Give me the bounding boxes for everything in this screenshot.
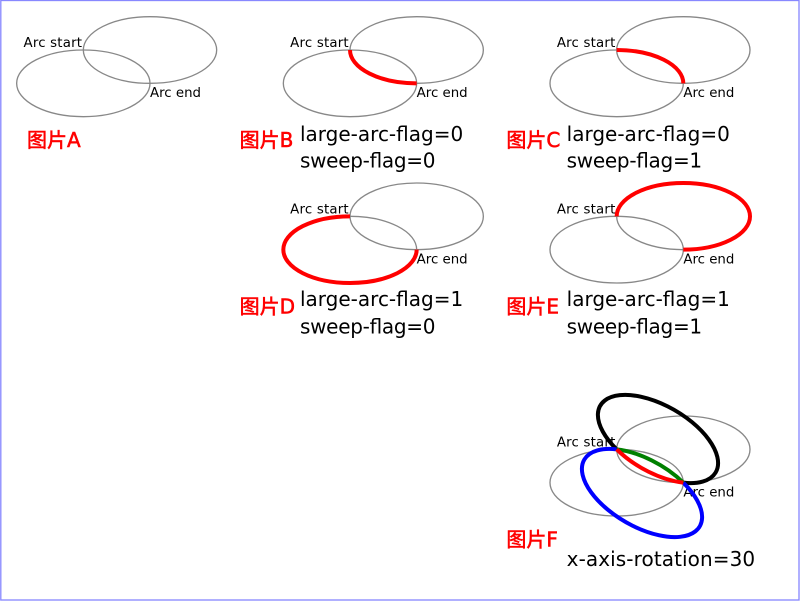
heading: figure F: 图片F	[506, 527, 558, 551]
text: figure D flags: sweep-flag=0	[300, 315, 436, 339]
panel: figure C	[506, 17, 750, 173]
panel: figure A: Arc start	[24, 36, 82, 51]
heading: figure E: 图片E	[506, 294, 559, 318]
panel: figure C: Arc end	[683, 86, 734, 101]
text: figure C flags: large-arc-flag=0	[567, 122, 730, 146]
panel: figure E: Arc end	[683, 252, 734, 267]
panel: figure A	[17, 17, 217, 152]
panel: figure B: Arc end	[417, 86, 468, 101]
heading: figure A: 图片A	[27, 128, 81, 152]
panel: figure C: Arc start	[557, 36, 615, 51]
panel: figure F	[506, 395, 755, 571]
panel: figure A: Arc end	[150, 86, 201, 101]
heading: figure C: 图片C	[506, 128, 560, 152]
panel: figure F: Arc end	[683, 485, 734, 500]
panel: figure B: Arc start	[290, 36, 349, 51]
text: figure C flags: sweep-flag=1	[567, 149, 702, 173]
text: figure E flags: sweep-flag=1	[567, 315, 702, 339]
text: figure E flags: large-arc-flag=1	[567, 287, 730, 311]
panel: figure D: Arc end	[417, 252, 468, 267]
panel: figure E: Arc start	[557, 202, 615, 217]
panel: figure E	[506, 183, 750, 339]
text: figure D flags: large-arc-flag=1	[300, 287, 463, 311]
panel: figure F: Arc start	[557, 435, 615, 450]
heading: figure B: 图片B	[240, 128, 293, 152]
text: figure B flags	[300, 122, 463, 173]
panel: figure D: Arc start	[290, 202, 349, 217]
text: figure F rotation: x-axis-rotation=30	[567, 547, 755, 571]
text: figure C flags	[567, 122, 730, 173]
text: figure E flags	[567, 287, 730, 339]
text: figure D flags	[300, 287, 463, 339]
heading: figure D: 图片D	[240, 294, 295, 318]
panel: figure B	[240, 17, 483, 173]
text: figure B flags: sweep-flag=0	[300, 149, 436, 173]
panel: figure D	[240, 183, 483, 339]
text: figure B flags: large-arc-flag=0	[300, 122, 463, 146]
